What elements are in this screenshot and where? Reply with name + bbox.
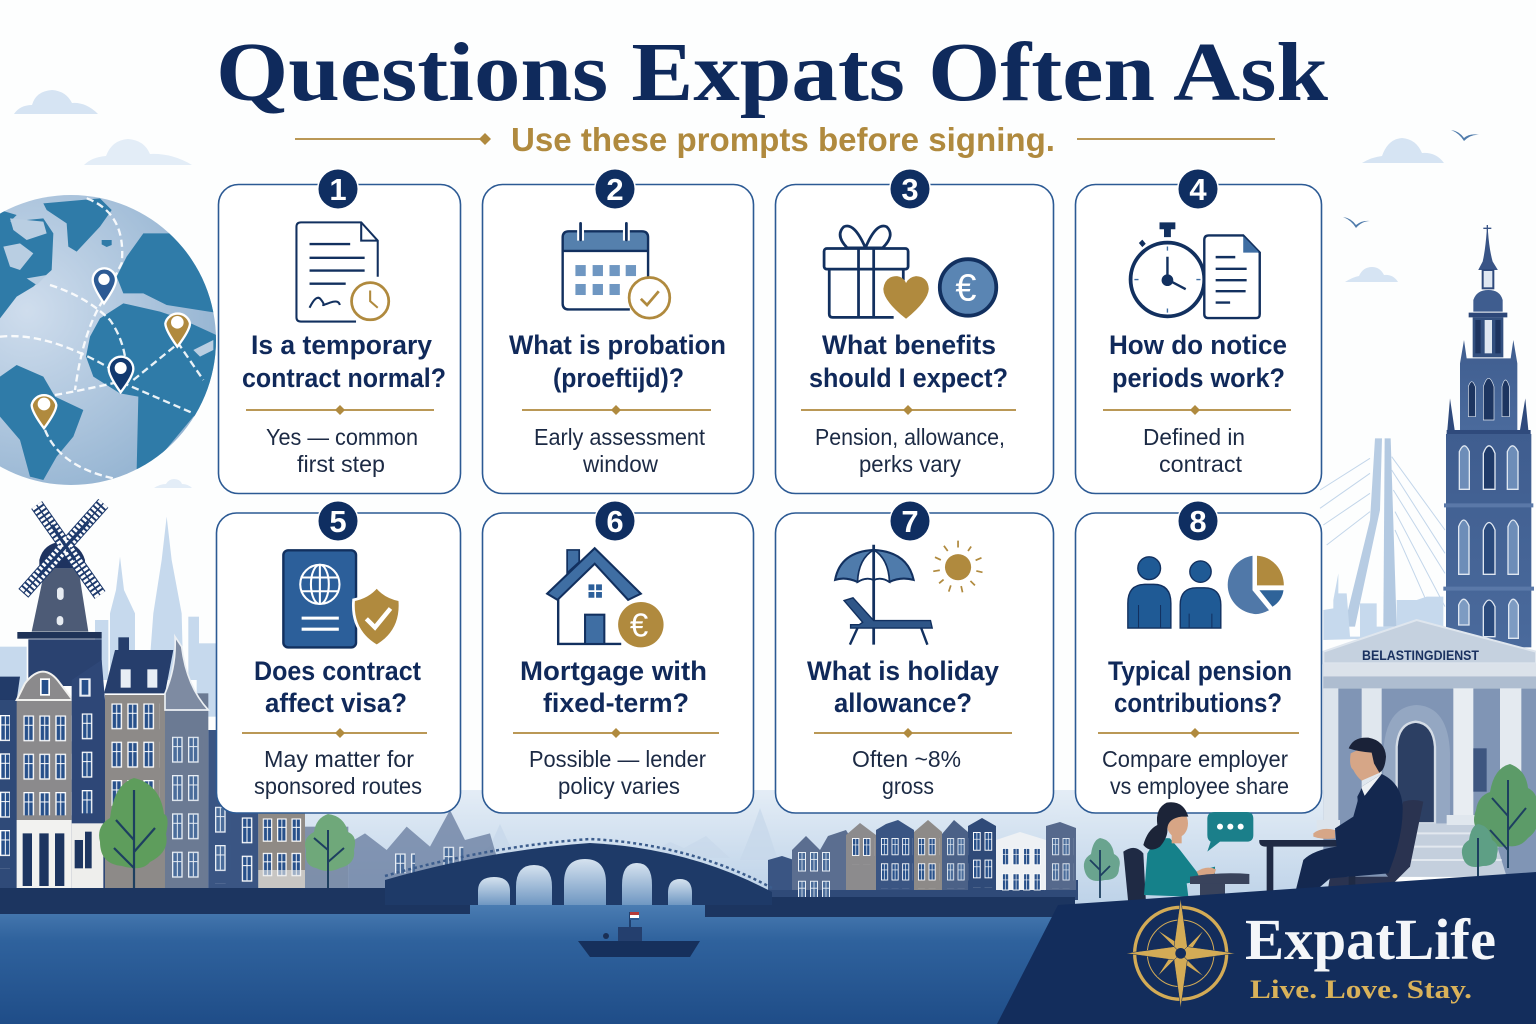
divider 8 bbox=[1098, 728, 1299, 738]
answer 2: Early assessment bbox=[534, 424, 706, 450]
panel 1: temporary contract bbox=[218, 168, 460, 494]
woman at desk bbox=[1123, 802, 1249, 903]
question 3 line 2: should I expect? bbox=[809, 363, 1008, 393]
question 4 line 2: periods work? bbox=[1112, 363, 1285, 393]
trees right bbox=[1084, 764, 1536, 898]
subtitle with ornaments: Use these prompts before signing. bbox=[511, 121, 1055, 158]
badge 6: 6 bbox=[606, 504, 624, 539]
answer 2 line 2: window bbox=[582, 451, 658, 477]
panel 4: notice periods bbox=[1076, 168, 1322, 494]
divider 7 bbox=[814, 728, 1012, 738]
riverside houses left bbox=[0, 637, 497, 914]
answer 6: Possible — lender bbox=[529, 746, 706, 772]
question 5 line 2: affect visa? bbox=[265, 688, 407, 718]
building inscription: BELASTINGDIENST bbox=[1362, 647, 1479, 663]
church tower bbox=[1443, 225, 1534, 647]
divider 3 bbox=[801, 405, 1016, 415]
answer 7 line 2: gross bbox=[882, 773, 934, 799]
panel 7: holiday allowance bbox=[776, 500, 1054, 813]
question 7: What is holiday bbox=[807, 656, 999, 686]
answer 1 line 2: first step bbox=[297, 451, 385, 477]
question 5: Does contract bbox=[254, 656, 421, 686]
icon: gift, heart and euro coin bbox=[824, 226, 996, 319]
answer 7: Often ~8% bbox=[852, 746, 961, 772]
quays bbox=[0, 888, 1075, 917]
title: Questions Expats Often Ask bbox=[216, 26, 1328, 119]
question 6: Mortgage with bbox=[520, 656, 707, 686]
badge 1: 1 bbox=[329, 172, 347, 207]
answer 1: Yes — common bbox=[266, 424, 418, 450]
answer 6 line 2: policy varies bbox=[558, 773, 680, 799]
question 2: What is probation bbox=[509, 330, 726, 360]
badge 7 bbox=[889, 500, 931, 542]
windmill bbox=[17, 503, 103, 686]
logo: compass emblem bbox=[1126, 898, 1236, 1008]
question 4: How do notice bbox=[1109, 330, 1287, 360]
answer 3: Pension, allowance, bbox=[815, 424, 1005, 450]
question 2 line 2: (proeftijd)? bbox=[553, 363, 684, 393]
badge 2: 2 bbox=[606, 172, 624, 207]
navy logo corner bbox=[997, 872, 1536, 1024]
panel 8: pension contributions bbox=[1076, 500, 1322, 813]
globe with map pins bbox=[0, 195, 220, 485]
icon: house with euro coin bbox=[547, 548, 664, 647]
question 1: Is a temporary bbox=[251, 330, 432, 360]
icon: stopwatch and document bbox=[1131, 222, 1260, 318]
badge 6 bbox=[594, 500, 636, 542]
badge 2 bbox=[594, 168, 636, 210]
icon: two people and pie chart bbox=[1128, 556, 1284, 628]
answer 4 line 2: contract bbox=[1159, 451, 1243, 477]
divider 4 bbox=[1103, 405, 1291, 415]
badge 8: 8 bbox=[1189, 504, 1207, 539]
subtitle with ornaments bbox=[295, 121, 1275, 158]
badge 8 bbox=[1177, 500, 1219, 542]
answer 5 line 2: sponsored routes bbox=[254, 773, 422, 799]
badge 5 bbox=[317, 500, 359, 542]
clouds and birds bbox=[14, 90, 1479, 488]
speech bubble bbox=[1207, 812, 1253, 852]
panel 2: probation bbox=[482, 168, 754, 494]
man at table bbox=[1259, 738, 1423, 900]
question 3: What benefits bbox=[822, 330, 996, 360]
icon: calendar with check bbox=[563, 222, 670, 318]
logo tagline: Live. Love. Stay. bbox=[1250, 975, 1472, 1004]
badge 3 bbox=[889, 168, 931, 210]
pale skyline haze bbox=[0, 517, 1330, 905]
divider 1 bbox=[246, 405, 434, 415]
answer 8 line 2: vs employee share bbox=[1110, 773, 1289, 799]
badge 1 bbox=[317, 168, 359, 210]
question 1 line 2: contract normal? bbox=[242, 363, 446, 393]
government building bbox=[1317, 620, 1536, 877]
answer 4: Defined in bbox=[1143, 424, 1245, 450]
icon: passport and shield bbox=[283, 550, 400, 647]
icon: beach umbrella, lounger and sun bbox=[835, 541, 983, 645]
boat bbox=[578, 912, 700, 957]
divider 6 bbox=[513, 728, 719, 738]
answer 3 line 2: perks vary bbox=[859, 451, 961, 477]
question 6 line 2: fixed-term? bbox=[543, 688, 689, 718]
question 8: Typical pension bbox=[1108, 656, 1292, 686]
badge 4: 4 bbox=[1189, 172, 1207, 207]
river bbox=[0, 905, 1100, 1024]
bridge pylon and cables bbox=[1320, 438, 1445, 640]
question 8 line 2: contributions? bbox=[1114, 688, 1282, 718]
logo wordmark: ExpatLife bbox=[1245, 907, 1496, 972]
answer 5: May matter for bbox=[264, 746, 414, 772]
answer 8: Compare employer bbox=[1102, 746, 1288, 772]
divider 2 bbox=[522, 405, 711, 415]
panel 6: mortgage bbox=[482, 500, 754, 813]
trees left bbox=[99, 778, 355, 892]
waterline houses centre right bbox=[768, 818, 1078, 910]
badge 5: 5 bbox=[329, 504, 347, 539]
icon: contract with clock bbox=[296, 222, 389, 322]
divider 5 bbox=[242, 728, 427, 738]
icon: gift, heart and euro coin: € bbox=[955, 268, 977, 310]
arched bridge bbox=[385, 839, 772, 905]
icon: house with euro coin: € bbox=[630, 607, 648, 644]
panel 5: visa bbox=[216, 500, 460, 813]
badge 4 bbox=[1177, 168, 1219, 210]
badge 3: 3 bbox=[901, 172, 919, 207]
question 7 line 2: allowance? bbox=[834, 688, 972, 718]
badge 7: 7 bbox=[901, 504, 919, 539]
panel 3: benefits bbox=[776, 168, 1054, 494]
